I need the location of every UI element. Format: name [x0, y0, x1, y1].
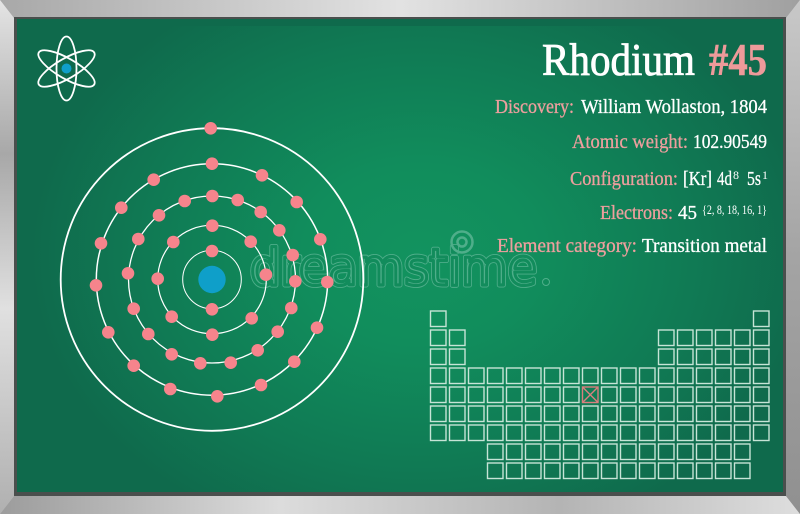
row 1	[430, 311, 769, 326]
electrons: Electrons:	[600, 202, 673, 224]
row 5	[430, 387, 769, 402]
electron shells	[61, 128, 363, 431]
row 3	[430, 349, 769, 364]
configuration: 8	[733, 168, 739, 182]
discovery: Discovery:	[495, 96, 574, 118]
configuration: [Kr]	[683, 168, 712, 190]
atomic weight: 102.90549	[693, 131, 767, 153]
element category: Element category:	[497, 235, 637, 257]
discovery	[495, 96, 767, 118]
watermark: dreamstime logo: dreamstime	[250, 239, 537, 298]
element category: Transition metal	[642, 235, 767, 257]
configuration: 1	[762, 168, 768, 182]
watermark: dreamstime logo: dreamstime	[250, 239, 537, 298]
discovery: William Wollaston, 1804	[581, 96, 767, 118]
title: #45	[709, 35, 767, 85]
title: Rhodium	[542, 35, 695, 85]
periodic table	[430, 311, 769, 478]
electrons: 45	[678, 202, 697, 224]
configuration: 4d	[717, 168, 732, 190]
Bohr model diagram of rhodium	[61, 122, 363, 431]
row 7	[430, 425, 769, 440]
nucleus	[198, 266, 226, 293]
electrons	[600, 202, 767, 224]
atomic weight: Atomic weight:	[572, 131, 688, 153]
row 4	[430, 368, 769, 384]
lanthanide row	[488, 444, 750, 460]
configuration: Configuration:	[570, 168, 678, 190]
configuration: 5s	[747, 168, 761, 190]
row 2	[430, 330, 769, 346]
row 6	[430, 406, 769, 422]
electrons	[90, 122, 334, 403]
icon: atom	[34, 36, 99, 100]
electrons: {2, 8, 18, 16, 1}	[702, 203, 767, 217]
actinide row	[488, 463, 750, 478]
configuration	[570, 168, 768, 190]
element category	[497, 235, 767, 257]
atomic weight	[572, 131, 767, 153]
highlighted rhodium cell	[582, 387, 598, 402]
